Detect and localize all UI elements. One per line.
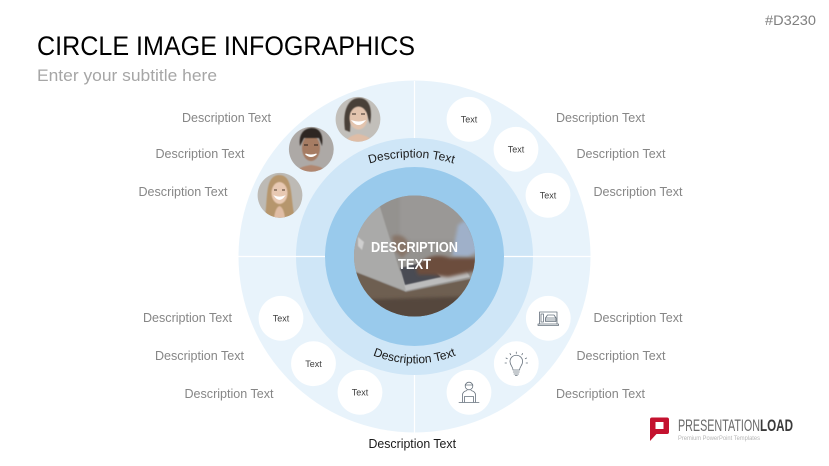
middle ring [296,138,533,375]
subtitle: Enter your subtitle here [37,66,217,85]
icon: light bulb [494,341,539,386]
logo wordmark bold: LOAD [760,416,793,435]
product code: #D3230 [765,13,816,28]
center label: TEXT [398,257,431,273]
description labels top right: Description Text [594,185,683,199]
text circle bottom left 3: Text [352,388,369,398]
description labels top right: Description Text [576,147,666,161]
icon: person at laptop [447,370,491,415]
text circle top right 2 [494,127,538,172]
text circle top right 3: Text [540,190,557,200]
circle diagram [238,80,590,432]
portrait: woman with dark hair [335,96,381,142]
text circle top right 1: Text [461,114,478,124]
description labels bottom right: Description Text [576,349,666,363]
description labels top left: Description Text [182,111,272,125]
text circle top right 3 [526,173,570,218]
description labels bottom left [143,311,274,401]
description labels bottom right: Description Text [594,311,683,325]
outer ring [238,80,590,432]
logo: PresentationLoad [650,416,793,442]
icon: laptop with car [526,296,571,341]
description labels bottom left: Description Text [184,387,274,401]
text circle top right 2: Text [508,144,525,154]
center label [371,240,458,273]
text circle bottom left 1 [259,296,303,341]
center label: DESCRIPTION [371,240,458,256]
description labels top left: Description Text [138,185,228,199]
description labels top right [556,111,683,199]
portrait: man with dark hair [288,126,334,172]
description labels top left [138,111,272,199]
text circle bottom left 3 [338,370,382,415]
text circle bottom left 2 [291,341,336,386]
center photo: laptop [354,196,475,316]
text circle bottom left 2: Text [305,359,322,369]
description labels bottom left: Description Text [155,349,245,363]
description labels bottom right: Description Text [556,387,646,401]
curved label top: Description Text [368,148,456,164]
portrait: blonde woman [257,172,303,218]
description labels top right: Description Text [556,111,646,125]
description labels bottom right [556,311,683,401]
icon: logo mark [650,418,669,441]
description labels bottom left: Description Text [143,311,233,325]
curved label bottom: Description Text [374,348,456,366]
logo wordmark: PRESENTATION [678,416,760,435]
title: CIRCLE IMAGE INFOGRAPHICS [37,31,415,61]
description label bottom center: Description Text [368,437,457,451]
text circle bottom left 1: Text [273,314,290,324]
text circle top right 1 [447,97,491,142]
inner ring [325,167,504,346]
description labels top left: Description Text [156,147,245,161]
logo tagline: Premium PowerPoint Templates [678,436,760,442]
